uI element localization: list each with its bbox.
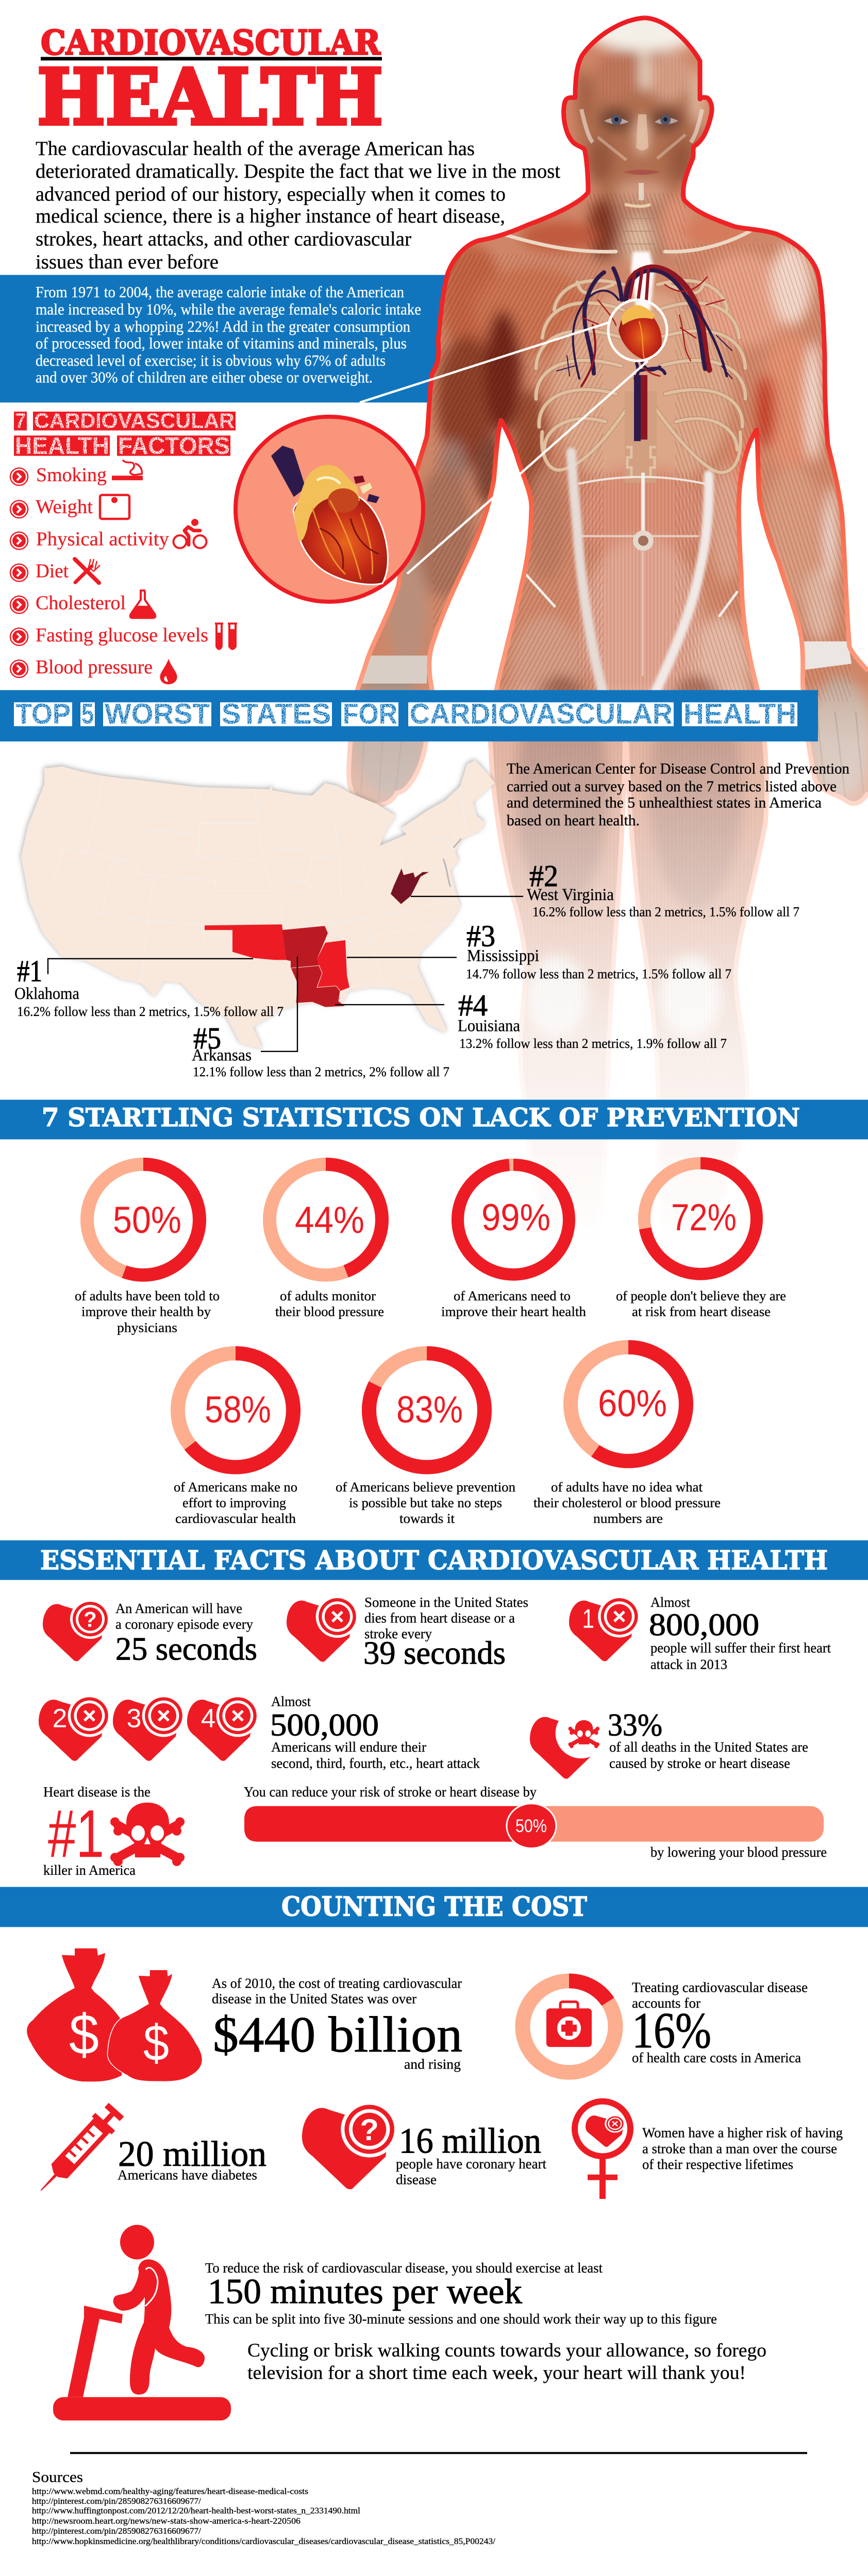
fact: reduce risk progress bar: 50% [515, 1816, 547, 1836]
text block: cycling or walking advice: Cycling or brisk walking counts towards your allowance, so forego [247, 2340, 766, 2361]
spine column [625, 392, 657, 483]
body outline [346, 15, 868, 1099]
donut: 50% [75, 1164, 220, 1335]
coastal details [334, 839, 461, 998]
label: #3 Mississippi [466, 919, 731, 981]
text block: calorie intake [36, 283, 421, 386]
fact: repeat heart attacks: second, third, fourth, etc., heart attack [271, 1756, 480, 1772]
fact: reduce risk progress bar: You can reduce your risk of stroke or heart disease by [244, 1784, 537, 1800]
icon: small skull and crossbones [569, 1720, 599, 1748]
text block: exercise recommendation [205, 2260, 717, 2327]
callout connector lines [360, 322, 648, 574]
state: West Virginia [391, 869, 429, 904]
sources list: Sources [32, 2469, 83, 2485]
factor: physical activity [10, 519, 206, 550]
panel: calorie intake blue background [0, 275, 454, 402]
heading: 7 cardiovascular health factors: 7 [15, 409, 26, 432]
text block: calorie intake: male increased by 10%, while the average female's caloric intake [36, 301, 421, 318]
title underline [41, 57, 382, 60]
icon: skull and crossbones [110, 1803, 185, 1866]
icon: weighing scale [100, 495, 129, 519]
heading: 7 cardiovascular health factors: FACTORS [118, 432, 230, 459]
section band: essential facts: ESSENTIAL FACTS ABOUT CARDIOVASCULAR HEALTH [40, 1545, 828, 1575]
text block: cycling or walking advice: television for a short time each week, your heart will thank you! [247, 2362, 746, 2383]
donut: 83%: is possible but take no steps [349, 1495, 502, 1511]
wrist bands and hands [355, 641, 863, 801]
sources list: http://pinterest.com/pin/285908276316609677/ [32, 2526, 201, 2536]
donut: 83%: of Americans believe prevention [336, 1479, 515, 1495]
sternum highlight [631, 251, 655, 325]
survey description text: carried out a survey based on the 7 metrics listed above [507, 778, 837, 795]
icon: flask [130, 590, 155, 618]
anatomical human body illustration [340, 10, 868, 1250]
heart callout ring small [608, 300, 667, 361]
fact: 33% of all deaths [530, 1708, 808, 1779]
label: #1 Oklahoma: #1 [17, 954, 42, 988]
donut: 44%: their blood pressure [275, 1304, 384, 1319]
donut: 50%: improve their health by [81, 1304, 211, 1319]
donut: 16% health care costs: accounts for [632, 1995, 701, 2011]
text block: calorie intake: and over 30% of children are either obese or overweight. [36, 369, 373, 386]
factor: fasting glucose levels: Fasting glucose levels [36, 624, 208, 646]
body muscle fill [340, 10, 868, 1250]
donut: 58%: of Americans make no [174, 1479, 297, 1495]
factor: weight: Weight [36, 496, 93, 518]
donut: 72% [616, 1163, 786, 1319]
icon: heart pin with cross [287, 1596, 359, 1662]
label: #2 West Virginia: #2 [529, 859, 558, 893]
text block: calorie intake: decreased level of exercise; it is obvious why 67% of adults [36, 352, 386, 369]
icon: heart pin with question mark [43, 1599, 110, 1662]
donut: 83%: 83% [396, 1388, 463, 1431]
text block: calorie intake: increased by a whopping 22%! Add in the greater consumption [36, 318, 410, 335]
factor: smoking: Smoking [36, 464, 107, 486]
icon: cyclist [173, 519, 206, 548]
donut: 60%: of adults have no idea what [551, 1479, 703, 1495]
fact: women stroke risk [575, 2102, 843, 2199]
icon: heart pin number 3: 3 [127, 1704, 141, 1733]
fact: coronary heart disease: people have coronary heart [396, 2156, 546, 2172]
icon: cigarette [112, 460, 143, 480]
icon: heart pin with question mark: ? [84, 1607, 97, 1631]
label: #4 Louisiana: 13.2% follow less than 2 metrics, 1.9% follow all 7 [459, 1036, 727, 1051]
heading: 7 cardiovascular health factors: HEALTH [15, 432, 109, 459]
fact: deaths every 39 seconds: dies from heart disease or a [364, 1611, 515, 1626]
factor: smoking [10, 460, 143, 486]
label: #4 Louisiana: Louisiana [458, 1017, 520, 1035]
donut: 99%: 99% [481, 1196, 550, 1239]
donut: 58%: effort to improving [182, 1495, 286, 1511]
icon: heart pin number 1 [569, 1596, 641, 1661]
icon: test tubes [215, 623, 237, 649]
intro paragraph: advanced period of our history, especially when it comes to [36, 183, 506, 206]
donut: 58%: cardiovascular health [175, 1511, 296, 1526]
label: #5 Arkansas: Arkansas [192, 1046, 252, 1065]
donut: 99%: improve their heart health [441, 1304, 587, 1319]
fact: women stroke risk: of their respective lifetimes [642, 2157, 793, 2173]
donut: 99%: of Americans need to [454, 1288, 571, 1303]
factor: diet [10, 559, 100, 583]
fact: coronary heart disease: 16 million [399, 2121, 541, 2161]
label: #1 Oklahoma [14, 954, 283, 1019]
donut: 58% [174, 1353, 297, 1526]
icon: heart pin with skull [530, 1708, 607, 1779]
fact: women stroke risk: a stroke than a man over the course [642, 2141, 837, 2157]
fact: 33% of all deaths: caused by stroke or heart disease [609, 1756, 790, 1772]
donut: 50%: of adults have been told to [75, 1288, 220, 1303]
donut: 16% health care costs: 16% [632, 2003, 711, 2059]
label: #3 Mississippi: 14.7% follow less than 2 metrics, 1.5% follow all 7 [466, 966, 731, 981]
fact: coronary episode: An American will have [115, 1601, 242, 1617]
map outline [21, 760, 495, 1049]
text block: exercise recommendation: This can be split into five 30-minute sessions and one should work their way up to this figure [205, 2311, 717, 2327]
factor: diet: Diet [36, 560, 69, 582]
state borders [27, 776, 466, 988]
icon: person on treadmill [53, 2225, 231, 2420]
text block: calorie intake: of processed food, lower intake of vitamins and minerals, plus [36, 335, 407, 352]
section band: 7 startling statistics [0, 1100, 868, 1139]
aorta and vena cava trunk [634, 375, 647, 441]
donut: 99% [441, 1165, 587, 1319]
text block: exercise recommendation: To reduce the risk of cardiovascular disease, you should exercise at least [205, 2260, 603, 2276]
fact: repeat heart attacks [39, 1693, 480, 1772]
fact: coronary episode: 25 seconds [115, 1631, 257, 1667]
fact: coronary episode: a coronary episode every [115, 1617, 253, 1632]
fact: 33% of all deaths: of all deaths in the United States are [609, 1739, 808, 1755]
icon: large heart pin: ? [360, 2112, 379, 2147]
icon: medical kit [546, 2002, 592, 2047]
fact: repeat heart attacks: Almost [271, 1693, 311, 1709]
title: Cardiovascular: CARDIOVASCULAR [41, 23, 380, 62]
intro paragraph: issues than ever before [36, 250, 219, 273]
donut: 50%: physicians [117, 1319, 177, 1335]
sources list: http://newsroom.heart.org/news/new-stats-show-america-s-heart-220506 [32, 2516, 301, 2526]
sources list: http://pinterest.com/pin/285908276316609677/ [32, 2496, 201, 2506]
small heart inside chest [608, 300, 667, 361]
icon: blood drop [160, 658, 177, 685]
survey description text: The American Center for Disease Control and Prevention [507, 760, 849, 777]
label: #1 Oklahoma: 16.2% follow less than 2 metrics, 1.5% follow all 7 [17, 1004, 283, 1019]
map of the United States [21, 760, 523, 1052]
sources list [32, 2469, 495, 2546]
panel: enlarged heart callout circle [236, 417, 423, 602]
fact: cost of treatment: and rising [404, 2057, 461, 2073]
donut: 60%: their cholesterol or blood pressure [533, 1495, 721, 1511]
clavicles [505, 231, 750, 252]
fact: reduce risk progress bar [244, 1784, 827, 1860]
factor: physical activity: Physical activity [36, 528, 170, 550]
donut: 72%: 72% [671, 1196, 737, 1239]
fact: first heart attack: 800,000 [649, 1608, 759, 1642]
factor: cholesterol [10, 590, 155, 618]
leader lines [48, 896, 523, 1052]
donut: 72%: of people don't believe they are [616, 1288, 786, 1303]
donut: 58%: 58% [205, 1388, 271, 1431]
icon: heart pin number 3 [113, 1694, 185, 1761]
fact: repeat heart attacks: Americans will endure their [271, 1739, 427, 1755]
donut: 60%: numbers are [593, 1511, 663, 1526]
intro paragraph: strokes, heart attacks, and other cardiovascular [36, 228, 411, 250]
fact: number one killer: killer in America [43, 1862, 136, 1878]
icon: heart pin number 2: 2 [53, 1704, 67, 1733]
donut: 83%: towards it [399, 1511, 455, 1526]
icon: female symbol with heart [575, 2102, 630, 2199]
icon: heart pin number 4 [187, 1694, 259, 1761]
icon: large heart pin [302, 2101, 398, 2189]
factor: blood pressure [10, 656, 177, 685]
donut: 72%: at risk from heart disease [632, 1304, 771, 1319]
icon: heart pin number 4: 4 [201, 1704, 215, 1733]
donut: 16% health care costs [523, 1980, 808, 2072]
fact: diabetes [31, 2101, 266, 2200]
survey description text: based on heart health. [507, 812, 640, 829]
factor: cholesterol: Cholesterol [36, 592, 126, 614]
section band: counting the cost: COUNTING THE COST [281, 1892, 587, 1923]
fact: first heart attack: Almost [650, 1595, 690, 1611]
state: Arkansas [282, 926, 328, 968]
section band: top 5 worst states: HEALTH [683, 698, 796, 730]
section band: top 5 worst states: STATES [222, 698, 331, 730]
rib cage [536, 281, 745, 472]
factor: blood pressure: Blood pressure [36, 656, 153, 678]
text block: calorie intake: From 1971 to 2004, the average calorie intake of the American [36, 283, 404, 301]
donut: 44%: 44% [295, 1198, 364, 1241]
donut: 50%: 50% [113, 1198, 181, 1241]
label: #2 West Virginia [527, 859, 799, 919]
fact: cost of treatment: As of 2010, the cost of treating cardiovascular [212, 1976, 462, 1992]
intro paragraph: deteriorated dramatically. Despite the fact that we live in the most [36, 160, 560, 182]
label: #2 West Virginia: 16.2% follow less than 2 metrics, 1.5% follow all 7 [532, 904, 799, 919]
donut: 44% [270, 1164, 384, 1319]
fact: deaths every 39 seconds [287, 1595, 528, 1671]
state: Mississippi [317, 940, 349, 991]
fact: cost of treatment: $440 billion [213, 2007, 462, 2063]
fact: diabetes: Americans have diabetes [118, 2167, 257, 2183]
icon: money bags: $ [69, 2003, 99, 2066]
fact: number one killer: #1 [48, 1795, 104, 1871]
fact: deaths every 39 seconds: stroke every [364, 1626, 432, 1642]
state: Louisiana [291, 965, 345, 1007]
icon: heart pin number 1: 1 [582, 1604, 594, 1634]
label: #2 West Virginia: West Virginia [527, 886, 614, 904]
fact: number one killer: Heart disease is the [43, 1784, 151, 1800]
icon: money bags [27, 1948, 202, 2081]
icon: heart pin number 2 [39, 1694, 111, 1761]
section band: counting the cost [0, 1887, 868, 1927]
fact: cost of treatment: disease in the United States was over [212, 1991, 417, 2007]
section band: top 5 worst states: TOP [15, 698, 71, 730]
fact: first heart attack: people will suffer their first heart [650, 1640, 831, 1656]
section band: top 5 worst states: WORST [105, 698, 210, 730]
fact: number one killer [43, 1784, 185, 1878]
fact: first heart attack: attack in 2013 [650, 1656, 727, 1672]
text block: cycling or walking advice [247, 2340, 766, 2383]
factor: weight [10, 495, 129, 519]
fact: repeat heart attacks: 500,000 [270, 1708, 379, 1742]
title: Health: HEALTH [37, 53, 383, 142]
fact: reduce risk progress bar: by lowering your blood pressure [650, 1844, 827, 1860]
sources list: http://www.webmd.com/healthy-aging/features/heart-disease-medical-costs [32, 2486, 308, 2496]
donut: 16% health care costs: Treating cardiovascular disease [632, 1980, 808, 1996]
fact: coronary heart disease [302, 2101, 546, 2189]
label: #5 Arkansas [192, 1021, 449, 1079]
label: #3 Mississippi: #3 [466, 919, 495, 953]
intro paragraph: The cardiovascular health of the average American has [36, 137, 475, 160]
fact: cost of treatment [212, 1976, 462, 2073]
sources list: http://www.huffingtonpost.com/2012/12/20/heart-health-best-worst-states_n_2331490.html [32, 2506, 360, 2516]
fact: first heart attack [569, 1595, 831, 1672]
icon: money bags: $ [143, 2014, 169, 2072]
fact: coronary episode [43, 1599, 257, 1667]
icon: enlarged anatomical heart [271, 446, 388, 584]
intro paragraph [36, 137, 560, 273]
fact: diabetes: 20 million [118, 2134, 266, 2174]
heading: 7 cardiovascular health factors [14, 409, 236, 459]
sources list: http://www.hopkinsmedicine.org/healthlibrary/conditions/cardiovascular_diseases/cardiovascular_disease_statistics_85,P00243/ [32, 2536, 495, 2546]
section band: 7 startling statistics: 7 STARTLING STATISTICS ON LACK OF PREVENTION [42, 1103, 800, 1132]
donut: 44%: of adults monitor [280, 1288, 376, 1303]
label: #3 Mississippi: Mississippi [467, 946, 539, 965]
icon: syringe [31, 2101, 126, 2200]
muscle fibres [433, 57, 850, 1098]
survey description text [507, 760, 849, 829]
head details [581, 109, 702, 244]
fact: deaths every 39 seconds: Someone in the United States [364, 1595, 528, 1611]
section band: top 5 worst states: CARDIOVASCULAR [410, 698, 673, 730]
label: #4 Louisiana [458, 988, 727, 1051]
text block: exercise recommendation: 150 minutes per week [208, 2272, 522, 2311]
section band: top 5 worst states: FOR [343, 698, 397, 730]
donut: 16% health care costs: of health care costs in America [632, 2050, 801, 2066]
fact: deaths every 39 seconds: 39 seconds [363, 1635, 506, 1671]
donut: 60%: 60% [598, 1382, 667, 1425]
icon: fork and knife [75, 559, 100, 583]
abdominal muscles and tendons [526, 452, 737, 696]
fact: 33% of all deaths: 33% [608, 1708, 662, 1742]
heading: 7 cardiovascular health factors: CARDIOVASCULAR [34, 409, 235, 432]
donut: 83% [336, 1353, 515, 1526]
fact: coronary heart disease: disease [396, 2172, 437, 2188]
fact: women stroke risk: Women have a higher risk of having [642, 2125, 843, 2141]
blood vessels [557, 267, 732, 386]
label: #4 Louisiana: #4 [458, 988, 488, 1022]
label: #5 Arkansas: 12.1% follow less than 2 metrics, 2% follow all 7 [193, 1064, 449, 1079]
label: #1 Oklahoma: Oklahoma [14, 985, 79, 1003]
label: #5 Arkansas: #5 [193, 1021, 221, 1055]
factor: fasting glucose levels [10, 623, 237, 649]
section band: top 5 worst states [0, 690, 818, 741]
section band: top 5 worst states: 5 [81, 698, 94, 730]
intro paragraph: medical science, there is a higher instance of heart disease, [36, 205, 505, 227]
donut: 60% [533, 1347, 721, 1526]
survey description text: and determined the 5 unhealthiest states in America [507, 794, 822, 811]
state: Oklahoma [205, 924, 286, 960]
